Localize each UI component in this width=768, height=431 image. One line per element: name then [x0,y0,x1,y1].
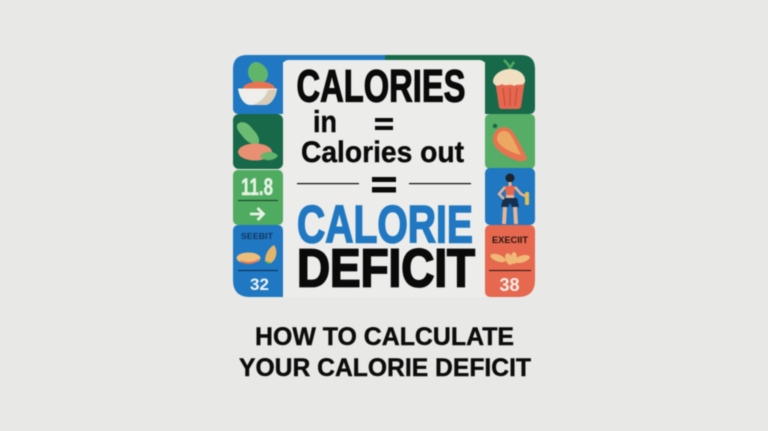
tile: blue person [485,168,535,225]
number: 32: 32 [250,275,269,294]
tile: dark green meat [233,114,283,169]
icon: arrow [250,208,264,220]
icon: woman exercising [499,174,529,224]
panel: top band blue [250,55,385,62]
icon: food [489,252,531,266]
divider line [489,270,531,271]
symbol: equals with rules [297,177,471,192]
tile: green carrot [485,114,535,169]
icon: salad bowl [238,62,277,105]
tile: green number [233,170,283,225]
title: how to calculate your calorie deficit: HOW TO CALCULATE [255,323,514,351]
tile: blue seebit [233,225,283,297]
tile: orange execiit [485,225,535,297]
text: in: in [313,104,337,139]
divider line [238,200,278,201]
icon: carrot [493,124,527,161]
number: 11.8: 11.8 [241,174,273,201]
divider line [238,270,278,271]
symbol: equals [375,118,393,130]
text: calories out: Calories out [301,136,464,169]
label: execiit: EXECIIT [492,235,529,245]
icon: food [236,245,276,264]
number: 38: 38 [499,275,520,295]
panel: left tile column [233,55,283,297]
panel: right tile column [485,55,535,297]
heading: deficit: DEFICIT [297,238,475,298]
title: how to calculate your calorie deficit: YOUR CALORIE DEFICIT [239,354,531,382]
tile: blue bowl [233,55,283,114]
heading: calories: CALORIES [296,60,466,111]
icon: cupcake [493,60,525,109]
heading: calorie: CALORIE [297,196,473,254]
tile: dark green cupcake [485,55,535,114]
label: seebit: SEEBIT [241,231,274,241]
title: how to calculate your calorie deficit [239,323,531,382]
panel: central equation [283,60,485,298]
icon: steak and greens [237,122,278,160]
panel: top band green [385,55,520,62]
